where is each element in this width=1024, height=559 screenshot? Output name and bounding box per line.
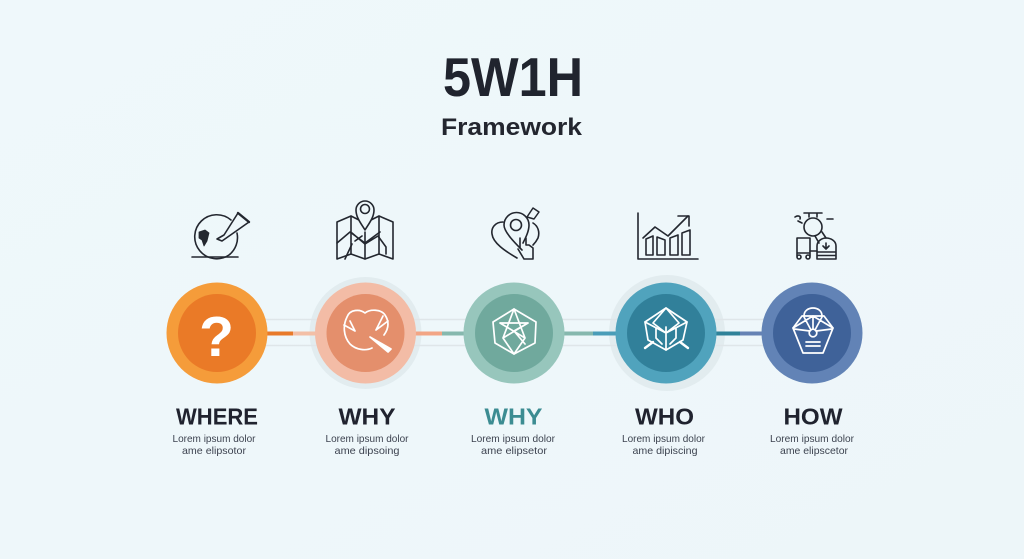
connector timeline	[262, 320, 770, 346]
label: who: WHO	[635, 404, 694, 430]
description: who	[622, 433, 705, 457]
description: where: ame elipsotor	[182, 445, 247, 457]
step: why (teal)	[464, 282, 564, 457]
description: how: ame elipscetor	[780, 445, 849, 457]
step: who	[616, 282, 716, 457]
description: why coral: Lorem ipsum dolor	[326, 433, 409, 445]
label: where: WHERE	[176, 404, 258, 430]
circle: why coral	[315, 282, 416, 384]
icon: person, cart and bell	[795, 213, 836, 259]
step: how	[762, 282, 862, 457]
description: why coral: ame dipsoing	[334, 445, 400, 457]
description: where: Lorem ipsum dolor	[172, 433, 256, 445]
description: why teal	[471, 433, 555, 457]
halo: why coral	[310, 277, 422, 389]
step: why (coral)	[315, 282, 416, 457]
step: where	[166, 282, 268, 457]
icon: globe and pencil	[192, 213, 249, 259]
description: who: Lorem ipsum dolor	[622, 433, 705, 445]
circle: where	[166, 282, 268, 384]
label: how: HOW	[784, 404, 843, 430]
description: who: ame dipiscing	[632, 445, 698, 457]
label: why teal: WHY	[484, 404, 542, 430]
description: how	[770, 433, 854, 457]
icon: map with pin	[337, 201, 393, 259]
subtitle: Framework	[441, 114, 582, 141]
circle: who	[616, 282, 716, 384]
description: how: Lorem ipsum dolor	[770, 433, 854, 445]
label: why coral: WHY	[338, 404, 396, 430]
icon: rising bar chart	[638, 213, 698, 259]
circle: how	[762, 282, 862, 384]
description: where	[172, 433, 256, 457]
description: why teal: ame elipsetor	[481, 445, 548, 457]
circle: where: ?	[199, 305, 234, 369]
title: 5W1H	[443, 46, 583, 108]
halo: who	[609, 275, 725, 391]
description: why coral	[326, 433, 409, 457]
icon: heart, pin and hand	[492, 208, 539, 259]
circle: why teal	[464, 282, 564, 384]
description: why teal: Lorem ipsum dolor	[471, 433, 555, 445]
